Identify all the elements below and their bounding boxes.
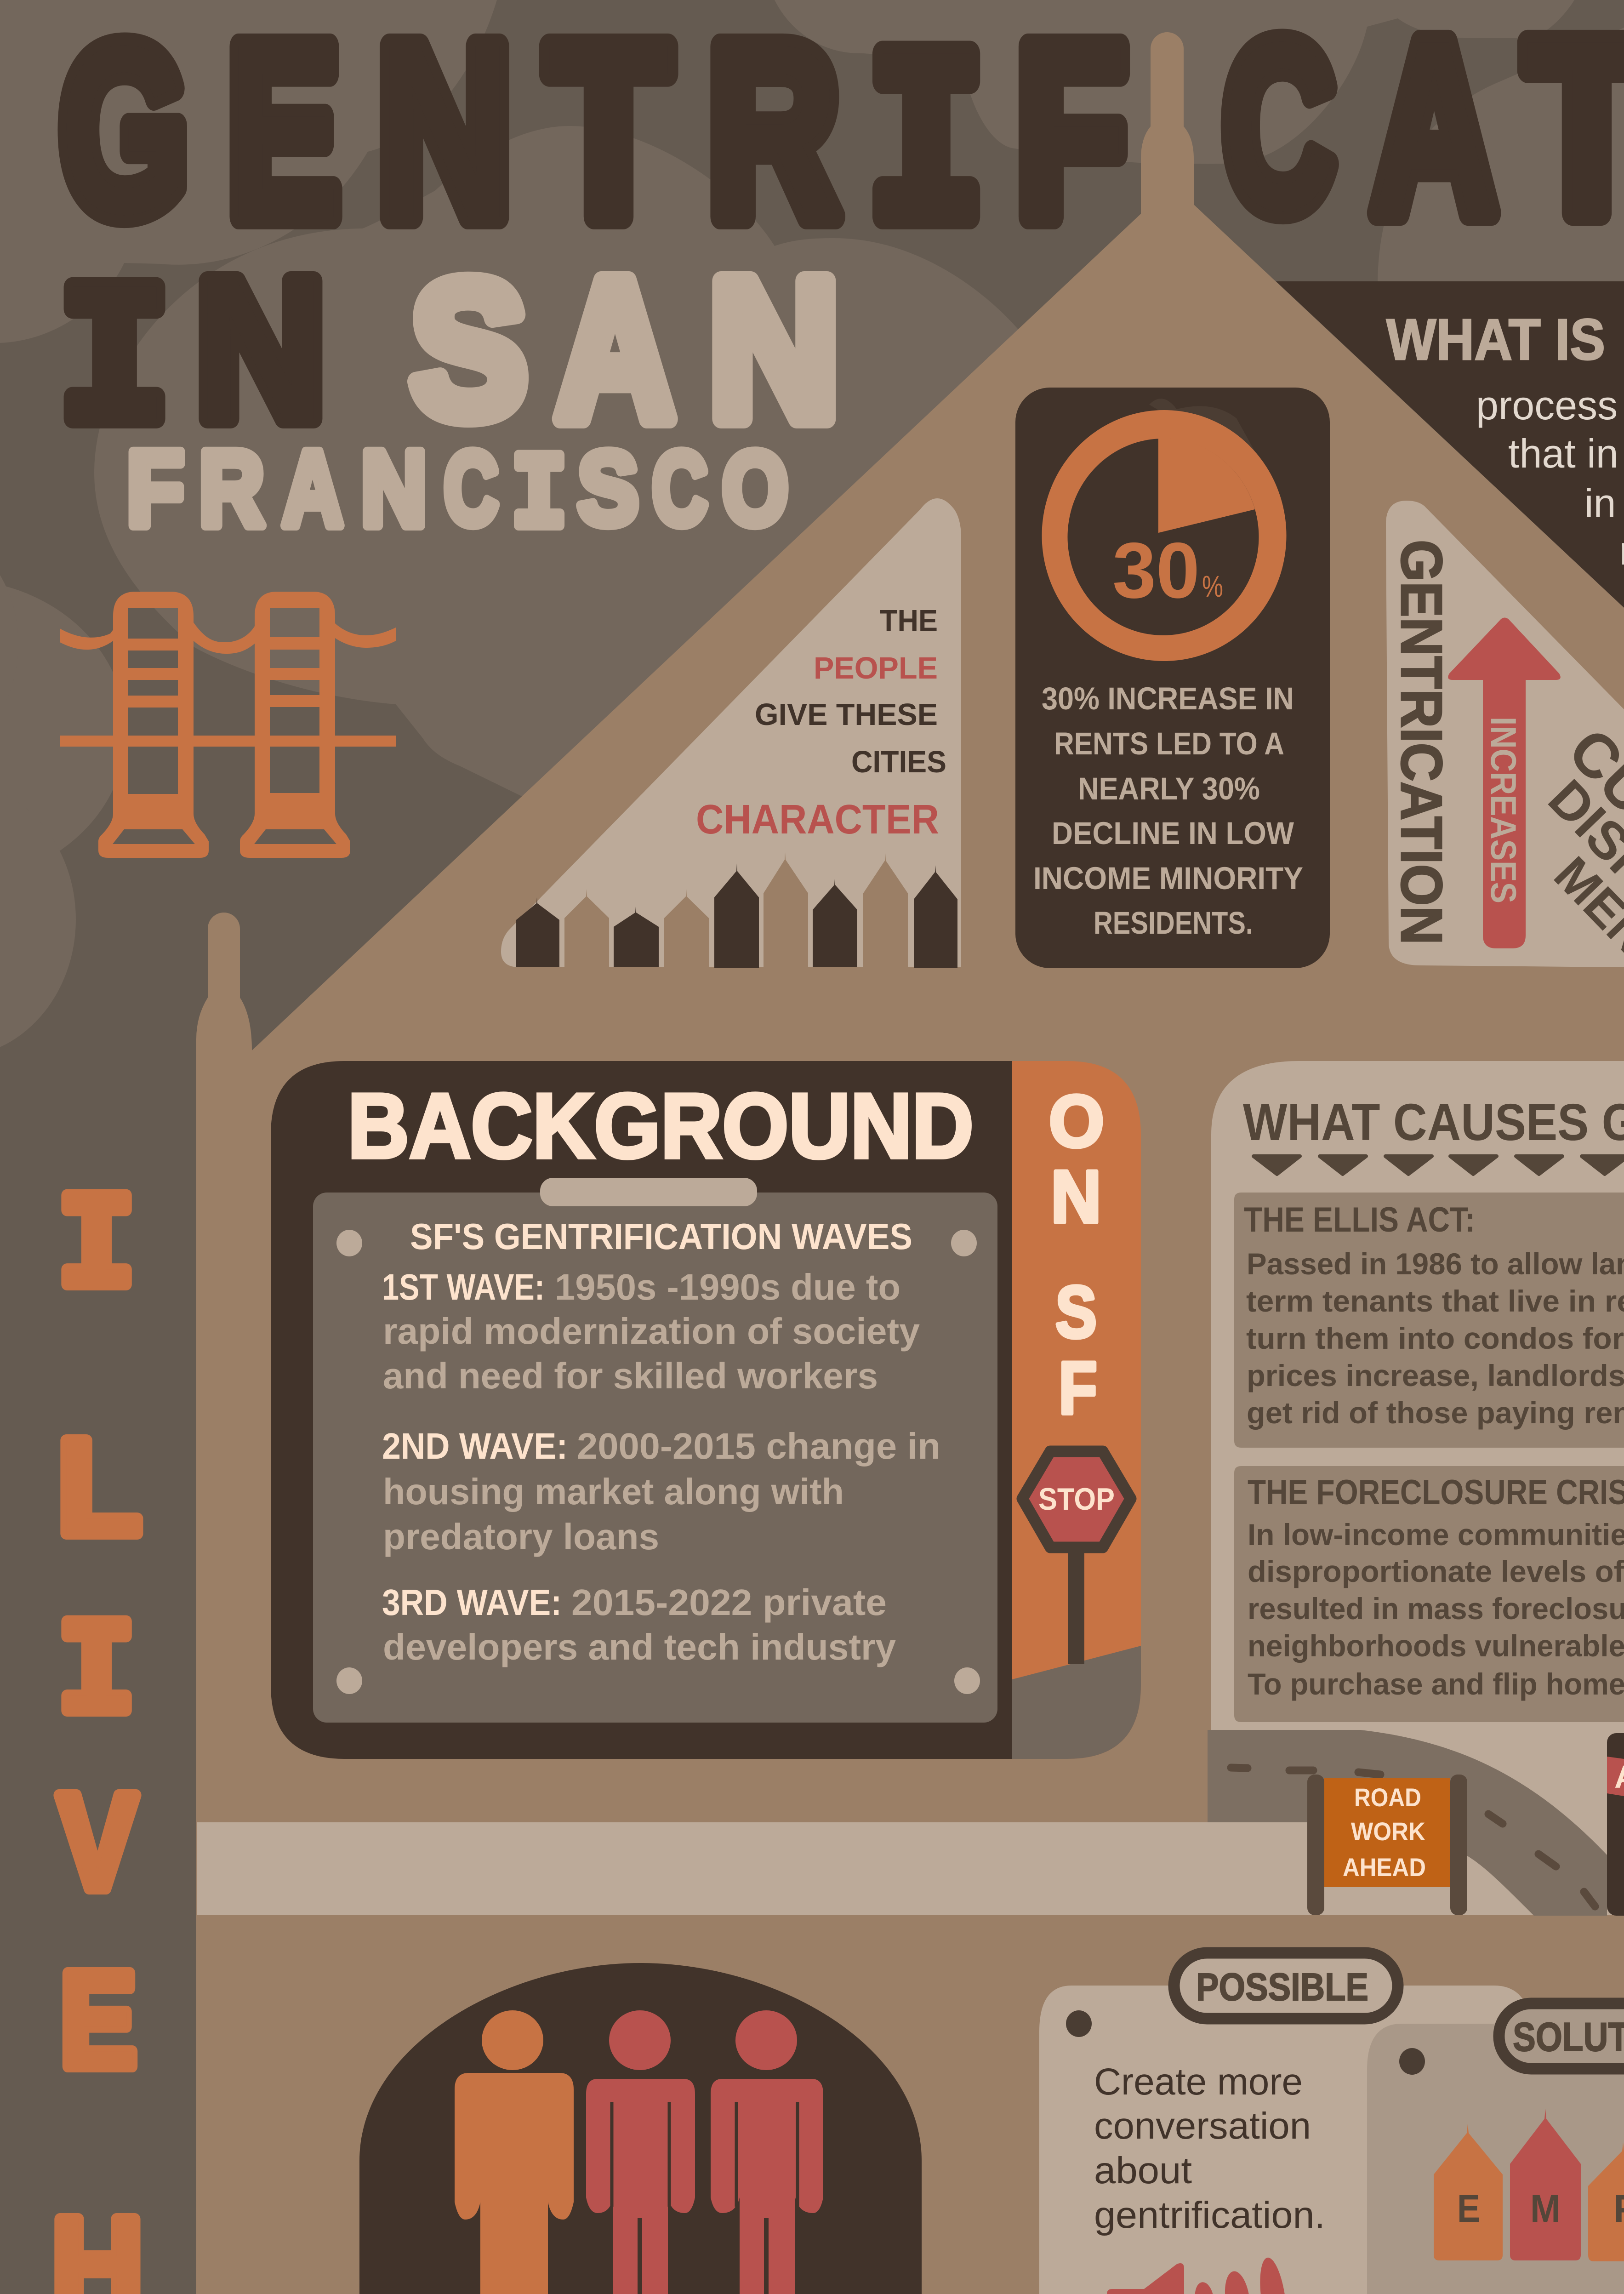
panel: 30 percent stat xyxy=(1015,388,1330,968)
text: rents stat: RENTS LED TO A xyxy=(1054,726,1284,761)
card: the ellis act: THE ELLIS ACT: xyxy=(1244,1200,1475,1239)
card: the foreclosure crisis: neighborhoods vulnerable xyxy=(1248,1629,1624,1663)
text: rents stat: RESIDENTS. xyxy=(1094,905,1253,941)
title: FRANCISCO: I xyxy=(511,436,567,558)
text: first wave: 1950s -1990s due to xyxy=(555,1267,900,1307)
title: SAN: N xyxy=(709,238,839,462)
text: rents stat: INCOME MINORITY xyxy=(1033,861,1303,896)
sign: road work ahead: AHEAD xyxy=(1343,1853,1426,1882)
title: SAN: S xyxy=(411,242,527,457)
text: rents stat xyxy=(1033,681,1303,941)
text: create more conversation: conversation xyxy=(1094,2105,1311,2147)
what is gentrification text xyxy=(1386,307,1624,573)
title: FRANCISCO: F xyxy=(127,429,184,548)
title: FRANCISCO: N xyxy=(361,429,427,548)
icon: house P xyxy=(1588,2142,1624,2261)
left column: I LIVE H: L xyxy=(57,1411,142,1563)
title: GENTRIFICATION: E xyxy=(227,0,340,269)
title: GENTRIFICATION: I xyxy=(868,11,985,291)
card: the foreclosure crisis: resulted in mass foreclosu xyxy=(1248,1592,1624,1626)
text: second wave: 2000-2015 change in xyxy=(577,1426,940,1467)
text: first wave: and need for skilled workers xyxy=(383,1355,878,1396)
tag: possible xyxy=(1174,1953,1398,2019)
icon: red person xyxy=(586,2010,695,2294)
what is gentrification text: process xyxy=(1476,382,1618,428)
title: FRANCISCO: A xyxy=(282,429,343,548)
text: rents stat: 30% INCREASE IN xyxy=(1042,681,1294,716)
inner plaque xyxy=(313,1178,997,1723)
icon: row of houses xyxy=(516,852,957,968)
text: third wave: 3RD WAVE: xyxy=(382,1582,562,1623)
icon: stop sign: STOP xyxy=(1038,1482,1115,1517)
left column: I LIVE H: E xyxy=(60,1944,137,2095)
what is gentrification text: WHAT IS xyxy=(1386,307,1605,372)
title: GENTRIFICATION: N xyxy=(377,0,512,269)
what is gentrification text: that in xyxy=(1508,431,1618,476)
hillside xyxy=(1012,1646,1141,1759)
title: GENTRIFICATION: G xyxy=(60,0,188,264)
text: waves heading: SF'S GENTRIFICATION WAVES xyxy=(410,1216,912,1257)
text: create more conversation xyxy=(1094,2061,1325,2236)
title: GENTRIFICATION xyxy=(60,0,1624,291)
left column: I LIVE H: I xyxy=(57,1598,136,1752)
card: the foreclosure crisis: To purchase and flip home xyxy=(1248,1667,1624,1701)
text: the people give these cities character: CHARACTER xyxy=(696,797,939,843)
text: create more conversation: gentrification. xyxy=(1094,2194,1325,2236)
icon: orange person xyxy=(455,2010,574,2294)
vertical ON SF: F xyxy=(1059,1347,1097,1430)
sign: road work ahead: ROAD xyxy=(1354,1783,1421,1812)
text: second wave: housing market along with xyxy=(383,1471,844,1512)
icon: red person two xyxy=(711,2010,823,2294)
icon: golden gate bridge xyxy=(60,592,396,858)
card: the ellis act xyxy=(1234,1193,1624,1448)
title: GENTRIFICATION: F xyxy=(1016,0,1127,269)
vertical ON SF: N xyxy=(1051,1155,1101,1238)
chevrons xyxy=(1254,1156,1624,1174)
card: possible xyxy=(1039,1953,1531,2294)
light strip xyxy=(197,1822,1624,1915)
vertical ON SF xyxy=(1049,1080,1104,1430)
sign: road work ahead: WORK xyxy=(1351,1817,1425,1846)
title: GENTRIFICATION: R xyxy=(708,0,839,269)
chart: 30 percent donut xyxy=(1042,410,1286,661)
panel: what causes gentrification xyxy=(1211,1061,1624,1825)
text: rents stat: DECLINE IN LOW xyxy=(1052,816,1294,851)
text: first wave xyxy=(382,1267,920,1396)
text: third wave: 2015-2022 private xyxy=(571,1582,887,1623)
title: SAN xyxy=(411,238,839,462)
card: the foreclosure crisis: In low-income communitie xyxy=(1248,1518,1624,1552)
arrow label: INCREASES xyxy=(1483,717,1524,903)
title: SAN: A xyxy=(556,238,674,462)
title: IN xyxy=(58,238,326,479)
icon: house M: M xyxy=(1530,2187,1561,2230)
text: third wave xyxy=(382,1582,896,1667)
chart: 30 percent donut: % xyxy=(1202,569,1223,603)
left column: I LIVE H: I xyxy=(57,1171,136,1325)
text: second wave: 2ND WAVE: xyxy=(382,1426,568,1467)
text: the people give these cities character: THE xyxy=(880,604,938,638)
text: create more conversation: Create more xyxy=(1094,2061,1303,2103)
title: FRANCISCO: R xyxy=(199,429,264,548)
card: the foreclosure crisis: disproportionate levels of xyxy=(1248,1554,1624,1588)
icon: stop sign xyxy=(1022,1451,1131,1664)
what is gentrification dark panel xyxy=(1276,281,1624,608)
tag: solutions xyxy=(1499,2003,1624,2069)
title: GENTRIFICATION: T xyxy=(547,0,670,269)
icon: house E: E xyxy=(1457,2187,1480,2230)
panel: gentrification increases cultural displacement xyxy=(1386,501,1624,1004)
title: IN: I xyxy=(58,252,171,479)
card: the ellis act: get rid of those paying ren xyxy=(1247,1396,1624,1430)
heading: background: BACKGROUND xyxy=(348,1075,974,1177)
text: the people give these cities character: GIVE THESE xyxy=(755,697,938,732)
icon: house E xyxy=(1434,2124,1503,2260)
icon: up arrow xyxy=(1448,618,1561,948)
text: first wave: rapid modernization of society xyxy=(383,1311,920,1352)
text: the people give these cities character: CITIES xyxy=(851,745,946,779)
title: FRANCISCO: S xyxy=(578,430,638,546)
icon: megaphone xyxy=(1107,2256,1291,2294)
card: the ellis act: term tenants that live in re xyxy=(1246,1284,1624,1318)
title: FRANCISCO: C xyxy=(652,430,707,546)
left column: I LIVE H xyxy=(51,1171,143,2294)
text: second wave: predatory loans xyxy=(383,1516,659,1557)
card: the foreclosure crisis xyxy=(1234,1466,1624,1722)
text: the people give these cities character: PEOPLE xyxy=(814,651,938,685)
card: solutions xyxy=(1367,2003,1624,2294)
panel: background on SF xyxy=(271,1061,1141,1759)
clouds background xyxy=(0,0,1624,1057)
text: rents stat: NEARLY 30% xyxy=(1078,771,1260,806)
vertical label: GENTRICATION xyxy=(1389,540,1454,945)
text: create more conversation: about xyxy=(1094,2150,1192,2191)
chart: 30 percent donut: 30 xyxy=(1112,526,1200,615)
text: third wave: developers and tech industry xyxy=(383,1626,896,1667)
tag: possible: POSSIBLE xyxy=(1196,1965,1368,2009)
title: FRANCISCO xyxy=(127,429,788,558)
text: the people give these cities character xyxy=(696,604,946,843)
arch with people xyxy=(359,1963,922,2294)
panel: people give cities character xyxy=(501,498,961,967)
text: first wave: 1ST WAVE: xyxy=(382,1267,545,1307)
sign: right post with red band xyxy=(1607,1733,1624,1916)
left column: I LIVE H: V xyxy=(58,1766,137,1917)
vertical ON SF: O xyxy=(1049,1080,1104,1162)
title: IN: N xyxy=(195,238,326,462)
road xyxy=(1208,1730,1607,1916)
vertical ON SF: S xyxy=(1055,1271,1097,1353)
what is gentrification text: in xyxy=(1584,480,1616,526)
card: the ellis act: prices increase, landlords xyxy=(1247,1358,1624,1392)
sign: road work ahead xyxy=(1307,1775,1467,1915)
icon: house M xyxy=(1510,2109,1581,2260)
title: FRANCISCO: C xyxy=(444,430,498,546)
card: the ellis act: turn them into condos for xyxy=(1246,1321,1624,1355)
title: FRANCISCO: O xyxy=(723,430,788,546)
text: second wave xyxy=(382,1426,940,1557)
